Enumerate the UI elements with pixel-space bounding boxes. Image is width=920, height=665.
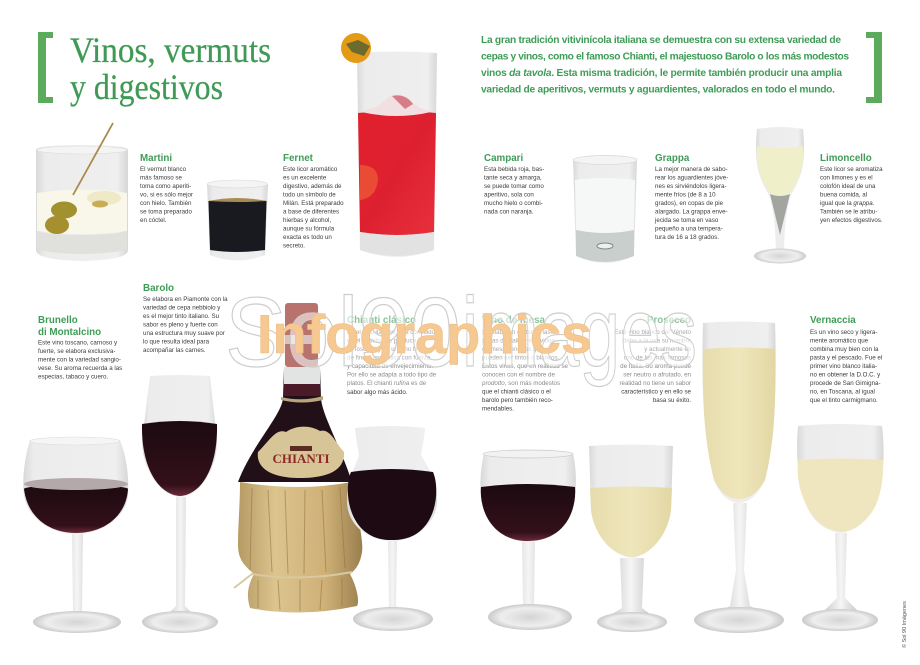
vernaccia text: pasta y el pescado. Fue el: [810, 354, 882, 362]
martini glass: [36, 123, 128, 261]
vernaccia text: Es un vino seco y ligera-: [810, 329, 877, 336]
prosecco text: basa su éxito.: [653, 397, 691, 404]
vino de mesa text: mendables.: [482, 406, 514, 412]
brunello text: Brunello: [38, 315, 78, 326]
prosecco text: [614, 315, 692, 404]
copyright note: © Sol 90 Imágenes: [901, 601, 908, 648]
chianti classico text: en el mundo. Se produce en: [347, 338, 425, 344]
grappa text: jecida se toma en vaso: [654, 217, 719, 224]
vino de mesa text: [481, 315, 569, 412]
campari text: [484, 153, 544, 216]
intro text: cepas y vinos, como el famoso Chianti, el majestuoso Barolo o los más modestos: [481, 52, 849, 62]
barolo text: una estructura muy suave por: [143, 330, 225, 337]
vernaccia glass: [797, 424, 884, 631]
grappa text: Grappa: [655, 153, 690, 164]
brunello text: di Montalcino: [38, 327, 101, 338]
fernet text: Este licor aromático: [283, 166, 338, 173]
limoncello text: yen efectos digestivos.: [820, 217, 883, 224]
campari text: nada con naranja.: [484, 208, 534, 216]
brunello text: Este vino toscano, carnoso y: [38, 340, 118, 346]
chianti glass: [347, 426, 437, 631]
limoncello text: colofón ideal de una: [820, 183, 876, 190]
limoncello text: buena comida, al: [820, 192, 867, 198]
grappa text: pequeño a una tempera-: [655, 226, 723, 232]
chianti classico text: platos. El chianti rufina es de: [347, 380, 427, 387]
vino de mesa glass: [480, 450, 576, 630]
martini text: más famoso se: [140, 174, 183, 182]
grappa text: mente fríos (de 8 a 10: [655, 192, 716, 198]
watermark: Infographics: Infographics: [257, 303, 592, 365]
vernaccia text: no en obtener la D.O.C. y: [810, 372, 881, 378]
campari text: se puede tomar como: [484, 183, 544, 190]
flute glass: [694, 322, 784, 633]
prosecco glass: [589, 444, 673, 632]
martini text: Martini: [140, 153, 172, 164]
chianti classico text: Es el vino italiano más conocido: [347, 329, 436, 336]
fernet text: aunque su fórmula: [283, 226, 335, 232]
watermark: Sol90images: Sol90: [225, 277, 461, 387]
fernet text: hierbas y alcohol,: [283, 217, 331, 224]
campari glass: [357, 52, 437, 257]
martini text: El vermut blanco: [140, 166, 187, 173]
campari text: tante seca y amarga,: [484, 174, 542, 182]
chianti classico text: Chianti clásico: [347, 315, 416, 326]
campari text: Esta bebida roja, bas-: [484, 166, 544, 173]
watermark: Sol90images: images: [462, 277, 697, 387]
grappa text: grados), en copas de pie: [655, 200, 724, 207]
fernet text: secreto.: [283, 242, 305, 250]
intro text: variedad de aperitivos, vermuts y aguardientes, valorados en todo el mundo.: [481, 84, 835, 96]
vernaccia text: mente aromático que: [810, 338, 869, 344]
grappa text: nes es sirviéndolos ligera-: [655, 183, 727, 190]
martini text: en cóctel.: [140, 217, 167, 224]
vernaccia text: primer vino blanco italia-: [810, 363, 877, 370]
prosecco text: característico y en ello se: [621, 388, 692, 396]
limoncello text: También se le atribu-: [820, 208, 877, 216]
limoncello text: Este licor se aromatiza: [820, 166, 883, 173]
grappa text: tura de 16 a 18 grados.: [655, 234, 719, 241]
prosecco text: realidad no tiene un sabor: [619, 380, 691, 387]
vino de mesa text: conocen con el nombre de: [482, 372, 555, 378]
prosecco text: y actualmente es: [644, 346, 691, 353]
grappa glass: [573, 156, 637, 263]
prosecco text: Este vino blanco del Véneto: [614, 329, 692, 336]
brunello text: fuerte, se elabora exclusiva-: [38, 348, 115, 355]
intro text: vinos da tavola. Esta misma tradición, le permite también producir una amplia: [481, 68, 842, 79]
prosecco text: ser neutro o afrutado, en: [623, 372, 692, 378]
title: Vinos, vermuts: [70, 30, 271, 70]
martini text: se toma preparado: [140, 208, 192, 216]
fernet text: todo un símbolo de: [283, 192, 336, 198]
barolo text: es el mejor tinto italiano. Su: [143, 313, 220, 320]
fernet text: Milán. Está preparado: [283, 200, 344, 207]
fernet text: [283, 153, 344, 250]
vernaccia text: que el tinto carmigmano.: [810, 397, 878, 404]
barolo text: [143, 283, 228, 354]
vino de mesa text: prodotto, son más modestos: [481, 380, 560, 387]
chianti bottle: CHIANTI: [272, 451, 330, 466]
chianti classico text: [347, 315, 437, 396]
intro text: La gran tradición vitivinícola italiana se demuestra con su extensa variedad de: [481, 35, 841, 46]
vino de mesa text: pueden ser tintos o blancos.: [482, 354, 560, 362]
fernet text: Fernet: [283, 153, 314, 164]
prosecco text: debe a la uva su nombre: [623, 338, 692, 344]
vernaccia text: combina muy bien con la: [810, 346, 879, 353]
brunello glass: [23, 437, 128, 633]
chianti classico text: y capacidad de envejecimiento.: [347, 363, 434, 370]
grappa text: La mejor manera de sabo-: [655, 166, 728, 173]
vernaccia text: procede de San Gimigna-: [810, 380, 881, 387]
martini text: [140, 153, 193, 224]
watermark: Sol90images: [225, 277, 697, 387]
fernet text: a base de diferentes: [283, 208, 339, 216]
limoncello text: Limoncello: [820, 153, 872, 164]
barolo text: sabor es pleno y fuerte con: [143, 322, 218, 328]
vino de mesa text: que el chianti clásico o el: [482, 388, 551, 396]
fernet text: digestivo, además de: [283, 183, 342, 190]
right bracket: [866, 32, 882, 103]
chianti classico text: de finura aromática con fuerza: [347, 354, 431, 362]
grappa text: rear los aguardientes jóve-: [655, 174, 728, 182]
fernet glass: [207, 180, 268, 260]
vernaccia text: no, en Toscana, al igual: [810, 388, 875, 396]
chianti classico text: la Toscana y es un vino tinto: [347, 346, 425, 353]
chianti classico text: Por ello se adapta a todo tipo de: [347, 372, 437, 378]
prosecco text: uno de los más famosos: [624, 354, 691, 362]
title: y digestivos: [70, 67, 223, 107]
vino de mesa text: Vino de mesa: [482, 315, 546, 326]
vino de mesa text: barolo pero también reco-: [482, 397, 553, 404]
vino de mesa text: zonas de Italia y son vinos: [482, 338, 555, 344]
brunello text: [38, 315, 122, 380]
vernaccia text: [810, 315, 882, 404]
martini text: toma como aperiti-: [140, 183, 191, 190]
chianti classico text: sabor algo más ácido.: [347, 389, 408, 396]
limoncello glass: [754, 127, 806, 264]
campari text: Campari: [484, 153, 523, 164]
martini text: vo, si es sólo mejor: [140, 192, 193, 198]
grappa text: [654, 153, 728, 241]
brunello text: especias, tabaco y cuero.: [38, 374, 108, 380]
brunello text: vese. Su aroma recuerda a las: [38, 365, 122, 372]
title: [70, 30, 271, 107]
campari text: aperitivo, sola con: [484, 192, 534, 198]
vino de mesa text: Se elaboran en todas las: [482, 329, 550, 336]
limoncello text: [820, 153, 883, 224]
prosecco text: de Italia. Su aroma puede: [620, 363, 692, 370]
barolo glass: [142, 375, 218, 633]
limoncello text: con limones y es el: [820, 174, 873, 182]
chianti bottle: [234, 303, 362, 613]
intro text: [481, 35, 849, 96]
fernet text: exacta es todo un: [283, 234, 332, 241]
fernet text: es un excelente: [283, 174, 327, 182]
barolo text: lo que resulta ideal para: [143, 338, 210, 346]
left bracket: [38, 32, 53, 103]
brunello text: mente con la variedad sangio-: [38, 356, 121, 364]
grappa text: alargado. La grappa enve-: [655, 208, 728, 216]
vernaccia text: Vernaccia: [810, 315, 856, 326]
vino de mesa text: de mesa sencillos que: [482, 346, 544, 353]
orange slice: [341, 33, 371, 63]
campari text: mucho hielo o combi-: [484, 200, 543, 207]
barolo text: acompañar las carnes.: [143, 347, 206, 354]
barolo text: variedad de cepa nebbiolo y: [143, 304, 221, 312]
barolo text: Se elabora en Piamonte con la: [143, 296, 228, 303]
barolo text: Barolo: [143, 283, 174, 294]
prosecco text: Prosecco: [647, 315, 691, 326]
vino de mesa text: Estos vinos, que en realidad se: [482, 363, 569, 370]
martini text: con hielo. También: [140, 200, 192, 207]
limoncello text: igual que la grappa.: [820, 200, 875, 207]
